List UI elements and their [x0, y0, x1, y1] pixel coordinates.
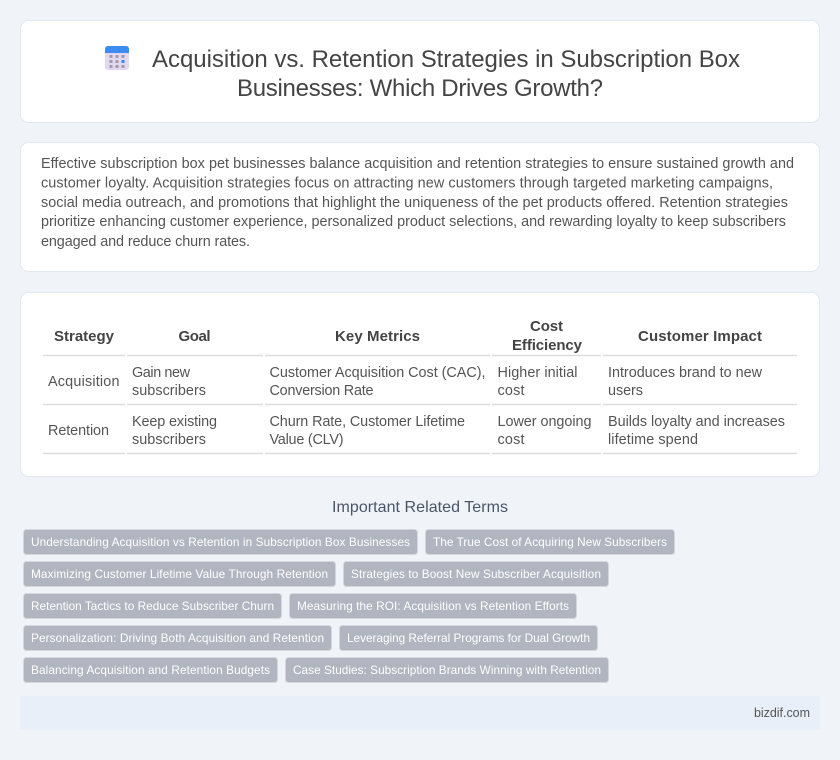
icon: calendar: [105, 46, 129, 70]
panel: comparison table: [20, 292, 820, 476]
table row: acquisition: Acquisition: [48, 374, 120, 390]
table row: retention: Lower ongoing: [498, 414, 592, 430]
related terms tags: Retention Tactics to Reduce Subscriber Churn: [31, 599, 274, 613]
table row: acquisition: cost: [498, 383, 524, 399]
related terms tags: The True Cost of Acquiring New Subscribers: [433, 535, 667, 549]
table header row: Strategy: [54, 328, 115, 345]
footer bar: [20, 696, 820, 730]
title: Acquisition vs. Retention Strategies in Subscription Box: [152, 46, 740, 73]
intro text block: prioritize enhancing customer experience, personalized product selections, and rewarding loyalty to keep subscribers: [41, 214, 786, 230]
related terms tags: Understanding Acquisition vs Retention in Subscription Box Businesses: [31, 535, 410, 549]
table row: retention: [48, 414, 785, 448]
table row: retention: Builds loyalty and increases: [608, 414, 785, 430]
intro text block: customer loyalty. Acquisition strategies focus on attracting new customers through targeted marketing campaigns,: [41, 176, 773, 192]
table row: retention: subscribers: [132, 432, 206, 448]
related terms tags: Leveraging Referral Programs for Dual Growth: [347, 631, 590, 645]
table row: acquisition: Gain new: [132, 365, 191, 381]
table row: retention: Churn Rate, Customer Lifetime: [270, 414, 465, 430]
table row: retention: Value (CLV): [270, 432, 344, 448]
table row: acquisition: subscribers: [132, 383, 206, 399]
header panel: [20, 20, 820, 122]
table row: acquisition: Customer Acquisition Cost (CAC),: [270, 365, 486, 381]
intro text block: [41, 156, 794, 250]
table header row: Cost: [530, 318, 563, 335]
panel: intro paragraph: [20, 142, 820, 272]
table row: acquisition: Conversion Rate: [270, 383, 374, 399]
related terms tags: Case Studies: Subscription Brands Winning with Retention: [293, 663, 601, 677]
table header row: Efficiency: [512, 337, 583, 354]
title: Businesses: Which Drives Growth?: [237, 75, 603, 102]
table header row: Key Metrics: [335, 328, 420, 345]
related terms tags: Measuring the ROI: Acquisition vs Retention Efforts: [297, 599, 569, 613]
table header row: Customer Impact: [638, 328, 762, 345]
table row: retention: lifetime spend: [608, 432, 698, 448]
intro text block: engaged and reduce churn rates.: [41, 234, 250, 250]
related terms tags: Balancing Acquisition and Retention Budgets: [31, 663, 270, 677]
table row: retention: cost: [498, 432, 524, 448]
table row: retention: Keep existing: [132, 414, 217, 430]
title: [152, 46, 740, 102]
footer bar: bizdif.com: [754, 706, 810, 720]
related terms tags: [24, 530, 674, 682]
table row: acquisition: Higher initial: [498, 365, 578, 381]
table header row: [54, 318, 762, 354]
heading: important related terms: Important Related Terms: [332, 499, 508, 516]
intro text block: social media outreach, and promotions that highlight the uniqueness of the pet products offered. Retention strategies: [41, 195, 788, 211]
intro text block: Effective subscription box pet businesses balance acquisition and retention strategies to ensure sustained growth and: [41, 156, 794, 172]
related terms tags: Maximizing Customer Lifetime Value Through Retention: [31, 567, 328, 581]
table row: acquisition: Introduces brand to new: [608, 365, 763, 381]
related terms tags: Strategies to Boost New Subscriber Acquisition: [351, 567, 601, 581]
table header row: Goal: [178, 328, 210, 345]
table row: acquisition: users: [608, 383, 643, 399]
table row: retention: Retention: [48, 423, 109, 439]
related terms tags: Personalization: Driving Both Acquisition and Retention: [31, 631, 324, 645]
table row: acquisition: [48, 365, 763, 399]
